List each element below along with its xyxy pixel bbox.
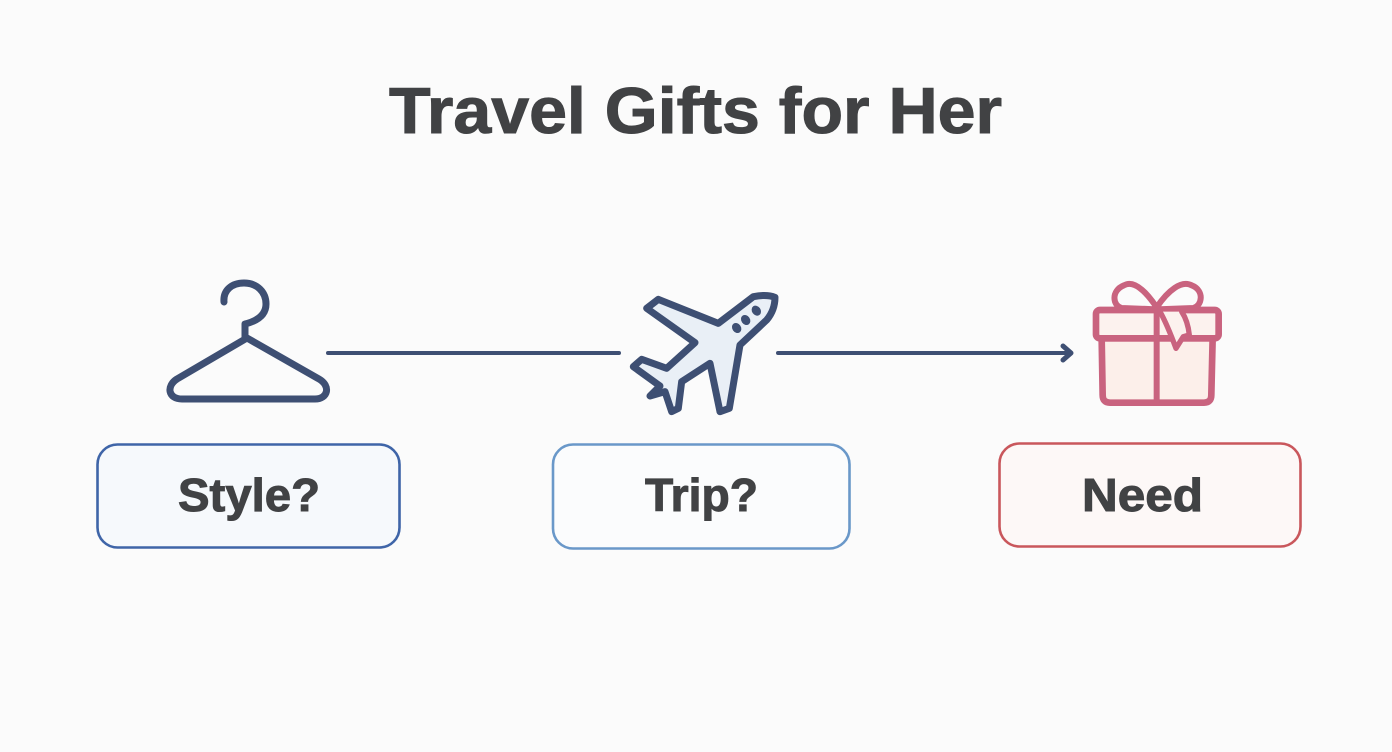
plane windows [730, 304, 763, 335]
box: Need [1000, 444, 1300, 546]
icon: airplane [633, 295, 775, 412]
box: Style?: Style? [178, 469, 320, 521]
icon: hanger [170, 283, 327, 399]
connector: hanger to plane [328, 351, 619, 355]
box: Trip? [553, 444, 850, 548]
box: Style? [98, 444, 400, 548]
title: Travel Gifts for Her [389, 74, 1002, 147]
box: Trip?: Trip? [645, 469, 758, 521]
box: Need: Need [1082, 469, 1203, 521]
icon: gift box [1096, 284, 1219, 403]
connector: plane to gift with arrow [778, 346, 1071, 360]
